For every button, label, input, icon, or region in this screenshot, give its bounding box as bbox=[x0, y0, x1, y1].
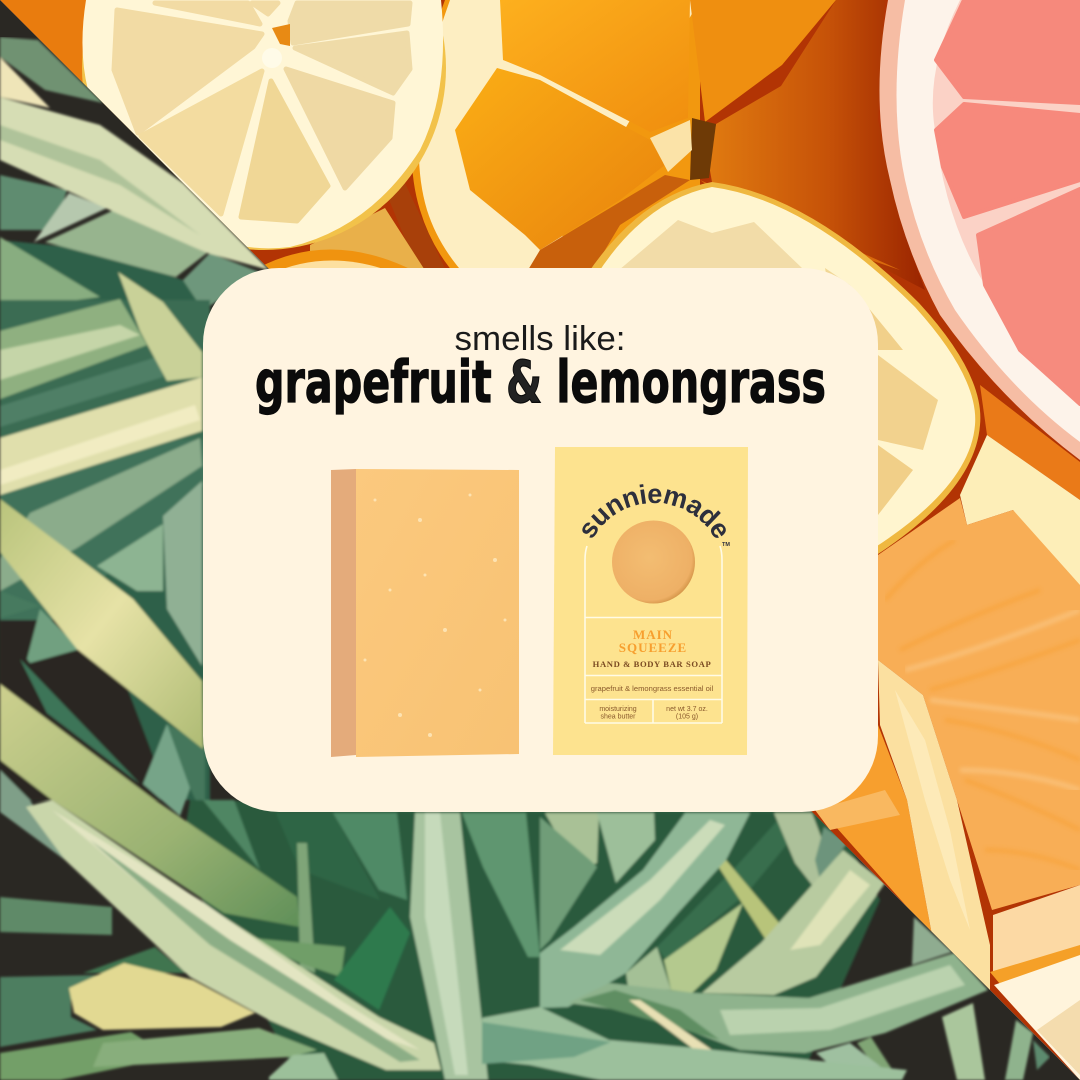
product name: SQUEEZE bbox=[619, 640, 687, 655]
fruit: lemon corner bottom right bbox=[990, 945, 1080, 1080]
leaves: bottom backdrop bbox=[180, 800, 880, 1080]
leaves: top left cluster bbox=[0, 37, 269, 330]
leaves: bottom centre vertical blades bbox=[410, 813, 655, 1080]
leaves: bottom left cluster bbox=[0, 684, 441, 1080]
fruit: large orange slice bbox=[412, 0, 925, 290]
attributes: shea butter bbox=[600, 714, 636, 720]
attributes: (105 g) bbox=[676, 714, 698, 720]
panel: cream product card bbox=[203, 268, 878, 812]
soap bar bbox=[331, 469, 519, 757]
product type: HAND & BODY BAR SOAP bbox=[593, 659, 711, 669]
trademark: TM bbox=[722, 542, 730, 548]
heading: grapefruit and lemongrass: grapefruit & lemongrass bbox=[255, 348, 826, 416]
attributes bbox=[599, 706, 708, 720]
fruit: orange and lemon behind lemon slice bbox=[264, 184, 444, 269]
product name: MAIN bbox=[633, 627, 673, 642]
fruit: orange band beneath grapefruit bbox=[980, 385, 1080, 500]
fruit: lemon slice top bbox=[82, 0, 446, 250]
soap window bbox=[612, 520, 695, 604]
arch and label lines bbox=[585, 546, 722, 723]
leaves: bottom right cluster bbox=[482, 813, 1050, 1080]
fruit: lemon slice centre right bbox=[586, 182, 980, 560]
product name bbox=[619, 627, 687, 655]
fruit: grapefruit slice bbox=[879, 0, 1080, 460]
text: smells like: smells like: bbox=[454, 320, 626, 358]
fruit: lower orange slice bbox=[878, 435, 1080, 972]
scent line: grapefruit & lemongrass essential oil bbox=[591, 684, 714, 693]
brand name on arc: sunniemade bbox=[582, 484, 726, 538]
attributes: moisturizing bbox=[599, 706, 637, 713]
soap box packaging bbox=[553, 447, 748, 755]
fruit: orange piece top left bbox=[0, 0, 86, 85]
leaves: left cluster bbox=[0, 272, 210, 860]
attributes: net wt 3.7 oz. bbox=[666, 706, 708, 713]
fruit: orange slice lower left with rind bbox=[812, 660, 990, 990]
